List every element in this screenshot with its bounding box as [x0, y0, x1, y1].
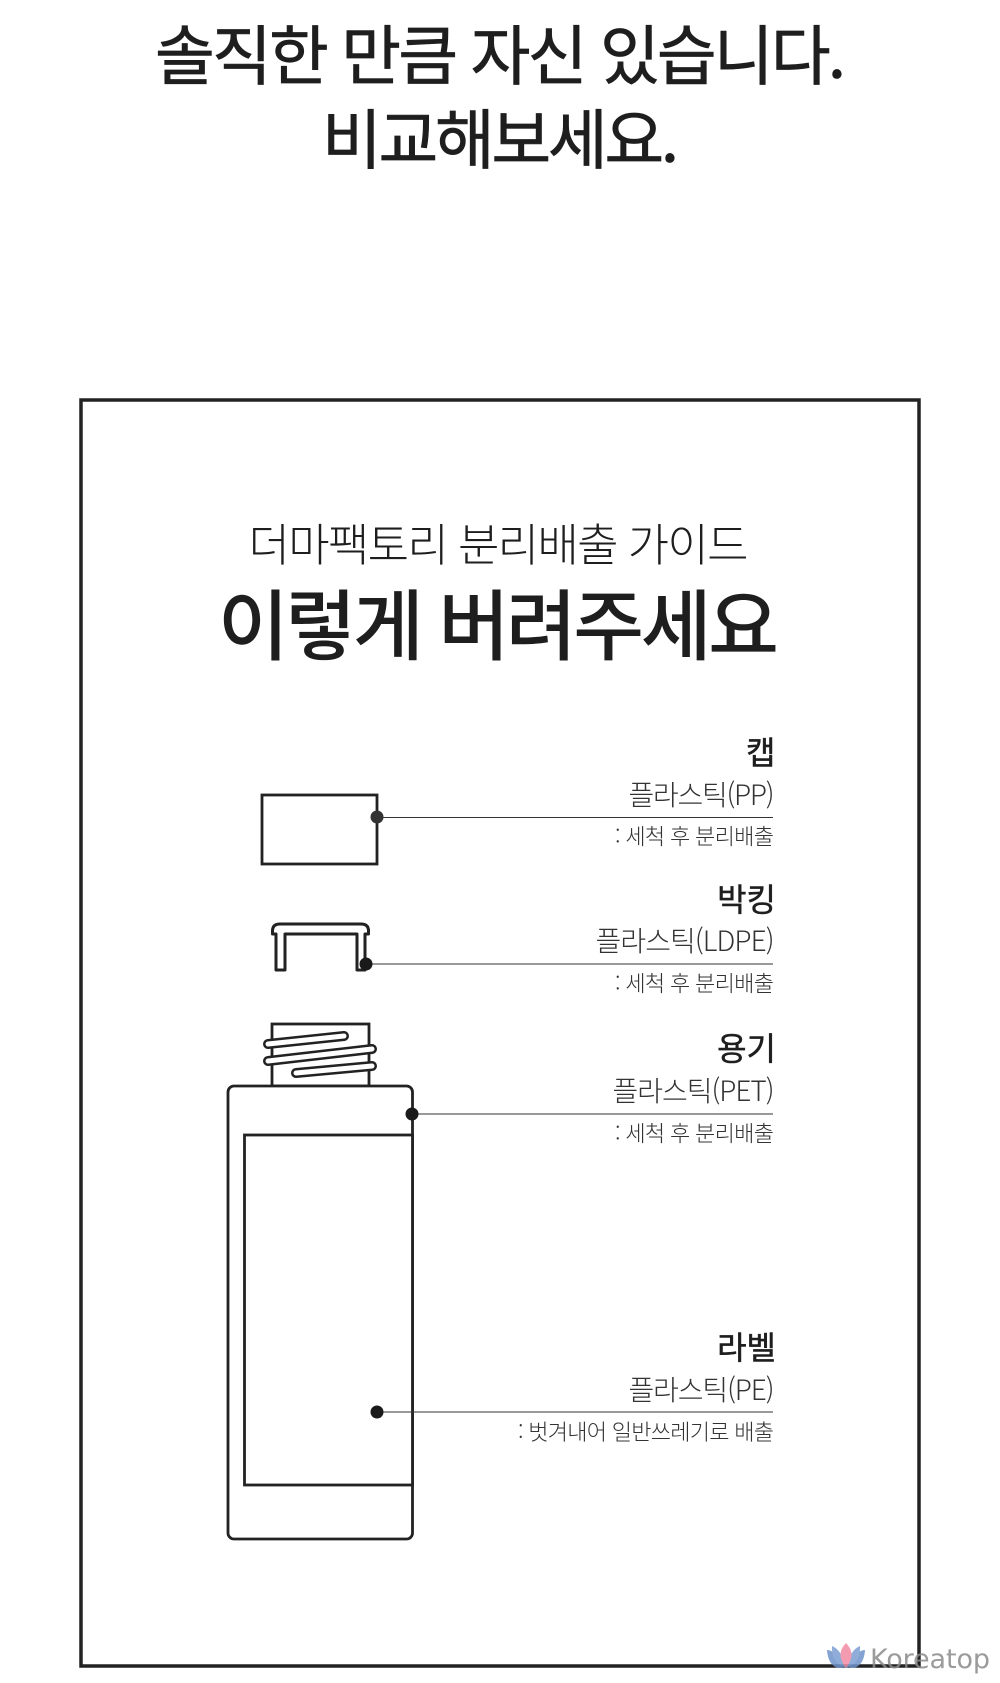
title	[155, 4, 846, 182]
watermark: Koreatop	[827, 1643, 990, 1675]
callout: cap: 캡	[746, 728, 776, 774]
icon: bottle	[228, 1024, 412, 1539]
bottle body	[228, 1086, 412, 1539]
callout: cap: 플라스틱(PP)	[628, 774, 774, 814]
bottle neck	[272, 1024, 369, 1086]
callout: packing: 플라스틱(LDPE)	[596, 920, 774, 960]
callout: bottle: 용기	[717, 1024, 776, 1070]
icon: packing	[272, 924, 368, 970]
callout: cap	[370, 728, 776, 852]
callout: label: 플라스틱(PE)	[628, 1369, 774, 1409]
icon: cap	[262, 795, 377, 864]
callout: cap: : 세척 후 분리배출	[615, 820, 774, 852]
title: 비교해보세요.	[322, 88, 679, 182]
title: 솔직한 만큼 자신 있습니다.	[155, 4, 846, 98]
callout: bottle: 플라스틱(PET)	[612, 1070, 774, 1110]
callout: packing: 박킹	[717, 875, 776, 921]
bottle label	[244, 1135, 412, 1485]
callout: label	[370, 1323, 776, 1447]
guide subtitle: 더마팩토리 분리배출 가이드	[248, 509, 748, 574]
callout: label: : 벗겨내어 일반쓰레기로 배출	[518, 1415, 774, 1447]
guide heading: 이렇게 버려주세요	[218, 566, 779, 677]
callout: packing: : 세척 후 분리배출	[615, 966, 774, 998]
watermark text: Koreatop	[870, 1644, 990, 1675]
callout: bottle: : 세척 후 분리배출	[615, 1116, 774, 1148]
bottle threads	[268, 1036, 372, 1073]
callout: label: 라벨	[717, 1323, 776, 1369]
callout: packing	[360, 875, 776, 998]
callout: bottle	[406, 1024, 776, 1148]
icon: lotus	[827, 1643, 865, 1668]
panel: disposal guide	[81, 400, 919, 1666]
